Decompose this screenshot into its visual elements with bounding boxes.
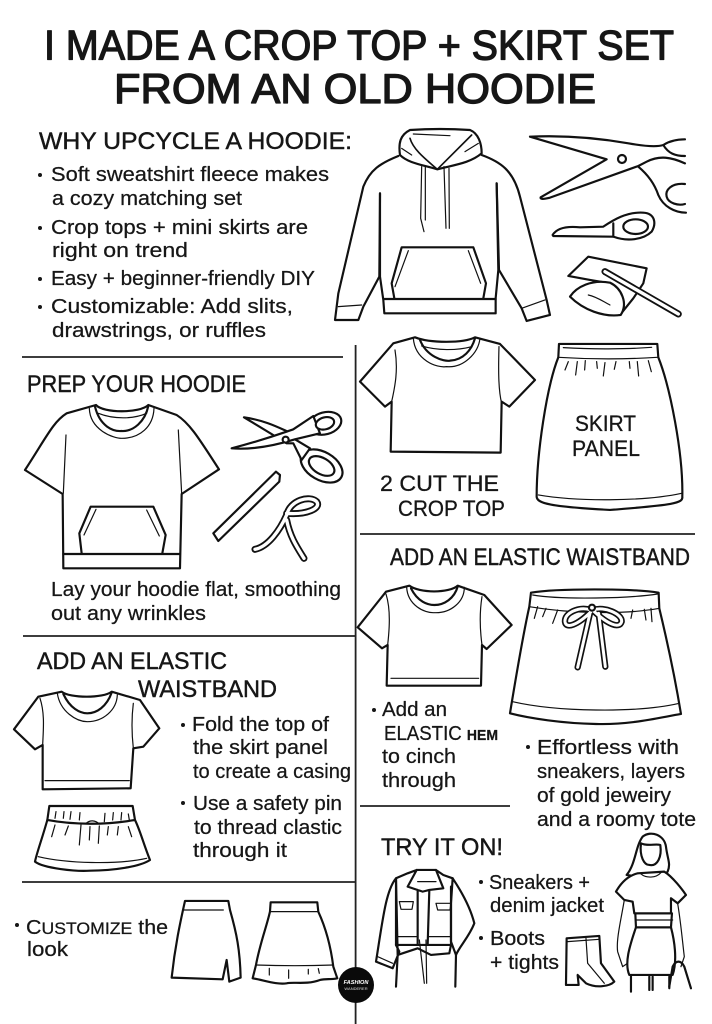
title — [44, 22, 674, 112]
bullet list: casing steps — [181, 714, 351, 862]
label: cut the crop top: CROP TOP — [398, 496, 505, 521]
icon: drawstring skirt — [510, 589, 681, 724]
bullet: styling — [526, 737, 696, 831]
icon: scissors — [232, 408, 348, 489]
bullet list: outfit ideas: Sneakers + — [489, 872, 590, 894]
bullet: elastic hem — [372, 699, 498, 792]
logo: fashion wanderer: WANDERER — [344, 986, 368, 991]
panel: try it on — [376, 834, 691, 992]
bullet list: casing steps: the skirt panel — [193, 737, 328, 759]
bullet: styling: Effortless with — [537, 737, 679, 759]
icon: skirt with ruffle — [253, 902, 337, 984]
bullet: elastic hem: to cinch — [382, 746, 456, 768]
title: FROM AN OLD HOODIE — [114, 65, 596, 112]
bullet list: outfit ideas — [479, 872, 604, 974]
panel: prep your hoodie — [25, 371, 348, 625]
bullet: elastic hem: through — [382, 770, 456, 792]
icon: crop top — [358, 586, 512, 686]
label: cut the crop top: 2 CUT THE — [380, 471, 499, 496]
caption: lay flat: out any wrinkles — [51, 603, 206, 625]
bullet list: reasons: right on trend — [52, 240, 188, 262]
bullet list: reasons: Customizable: Add slits, — [51, 296, 293, 318]
heading: why upcycle: WHY UPCYCLE A HOODIE: — [39, 128, 352, 155]
icon: cropped hoodie with pocket — [25, 405, 219, 568]
icon: denim jacket outfit — [376, 870, 474, 987]
panel: customize the look — [15, 901, 337, 984]
icon: crop top — [360, 337, 535, 453]
icon: mini skirt with casing — [35, 806, 150, 871]
caption: lay flat — [51, 579, 341, 625]
panel: cut the crop top — [360, 337, 682, 521]
title: I MADE A CROP TOP + SKIRT SET — [44, 22, 674, 68]
panel: add an elastic waistband, right — [358, 544, 696, 831]
icon: elastic ribbon — [255, 499, 318, 558]
bullet list: outfit ideas: denim jacket — [490, 895, 604, 917]
bullet list: casing steps: Fold the top of — [192, 714, 329, 736]
bullet: styling: and a roomy tote — [537, 809, 696, 831]
label: skirt panel: SKIRT — [575, 411, 636, 436]
bullet list: casing steps: to thread clastic — [194, 817, 342, 839]
bullet: styling: of gold jeweiry — [537, 785, 671, 807]
icon: hoodie — [335, 129, 550, 321]
bullet: customize: CUSTOMIZE the — [26, 917, 168, 939]
icon: skirt with slit — [172, 901, 241, 982]
panel: add an elastic waistband, left — [14, 648, 351, 871]
label: cut the crop top — [380, 471, 505, 521]
bullet list: casing steps: Use a safety pin — [193, 793, 342, 815]
heading: add an elastic waistband: ADD AN ELASTIC — [37, 648, 227, 675]
bullet: styling: sneakers, layers — [537, 761, 685, 783]
label: skirt panel: PANEL — [572, 436, 640, 461]
heading: try it on: TRY IT ON! — [381, 834, 503, 861]
icon: woman wearing the set — [616, 834, 691, 992]
icon: crop top — [14, 692, 159, 789]
heading: add an elastic waistband — [37, 648, 277, 703]
bullet list: reasons: a cozy matching set — [52, 188, 242, 210]
bullet: elastic hem: ELASTIC HEM — [384, 723, 498, 745]
icon: tailor's chalk and fabric — [568, 257, 678, 315]
icon: boots — [566, 936, 614, 986]
caption: lay flat: Lay your hoodie flat, smoothing — [51, 579, 341, 601]
bullet list: reasons: drawstrings, or ruffles — [52, 320, 266, 342]
bullet list: reasons: Crop tops + mini skirts are — [51, 217, 308, 239]
icon: fabric shears — [530, 136, 686, 213]
icon: skirt panel — [537, 344, 682, 510]
heading: prep your hoodie: PREP YOUR HOODIE — [27, 371, 246, 398]
logo: fashion wanderer: FASHION — [344, 980, 369, 986]
bullet: elastic hem: Add an — [382, 699, 447, 721]
panel: why upcycle a hoodie — [38, 128, 352, 342]
bullet list: casing steps: to create a casing — [193, 761, 351, 783]
bullet list: outfit ideas: + tights — [490, 952, 559, 974]
bullet: customize — [15, 917, 168, 961]
bullet list: reasons — [38, 164, 329, 342]
bullet list: casing steps: through it — [193, 840, 287, 862]
icon: seam ripper — [553, 213, 654, 239]
icon: fabric strip — [213, 472, 280, 541]
bullet list: reasons: Easy + beginner-friendly DIY — [51, 268, 315, 290]
heading: add an elastic waistband: WAISTBAND — [138, 676, 277, 703]
label: skirt panel — [572, 411, 640, 461]
bullet list: reasons: Soft sweatshirt fleece makes — [51, 164, 329, 186]
bullet list: outfit ideas: Boots — [490, 928, 545, 950]
bullet: customize: look — [27, 939, 69, 961]
logo: fashion wanderer — [338, 967, 374, 1003]
